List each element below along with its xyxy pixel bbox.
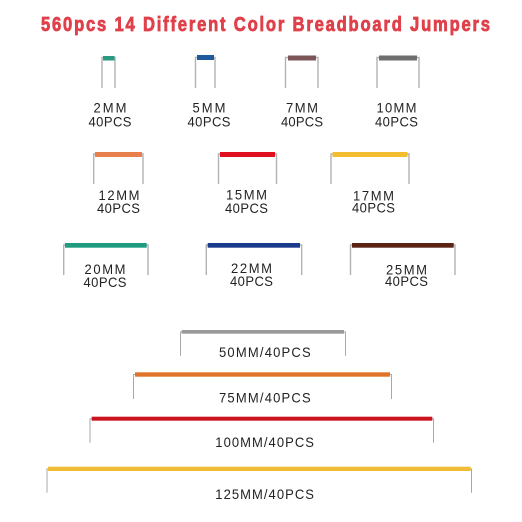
jumper: 75MM orange: 75MM/40PCS	[219, 390, 311, 406]
jumper: 100MM red	[90, 417, 434, 450]
jumper: 50MM gray: 50MM/40PCS	[219, 345, 311, 360]
jumper: 100MM red: 100MM/40PCS	[215, 435, 314, 450]
jumper: 7MM brown	[281, 56, 323, 130]
jumper: 20MM teal: 20MM	[84, 262, 126, 277]
jumper: 10MM gray: 10MM	[376, 100, 416, 116]
jumper: 22MM navy	[206, 243, 302, 289]
jumper: 15MM red: 40PCS	[225, 201, 268, 216]
jumper: 15MM red	[218, 152, 276, 216]
jumper: 10MM gray	[375, 56, 419, 130]
jumper: 125MM yellow	[47, 467, 472, 502]
jumper: 20MM teal	[64, 243, 148, 290]
jumper: 5MM blue: 40PCS	[188, 114, 230, 130]
jumper: 5MM blue	[188, 55, 230, 130]
jumper: 125MM yellow: 125MM/40PCS	[215, 487, 314, 502]
title: 560pcs 14 Different Color Breadboard Jumpers	[41, 13, 490, 35]
jumper: 25MM dark brown	[350, 243, 455, 289]
jumper: 20MM teal: 40PCS	[84, 275, 126, 290]
jumper: 7MM brown: 40PCS	[281, 114, 323, 130]
jumper: 12MM orange: 12MM	[98, 188, 140, 203]
jumper: 22MM navy: 22MM	[231, 261, 272, 276]
jumper: 17MM yellow	[331, 152, 409, 216]
jumper: 10MM gray: 40PCS	[375, 114, 418, 130]
jumper: 2MM teal	[88, 56, 131, 130]
jumper: 25MM dark brown: 25MM	[386, 262, 427, 278]
jumper: 12MM orange	[94, 152, 143, 216]
jumper: 5MM blue: 5MM	[192, 100, 226, 116]
jumper: 7MM brown: 7MM	[286, 100, 318, 116]
jumper: 17MM yellow: 17MM	[353, 188, 394, 204]
jumper: 2MM teal: 2MM	[94, 100, 127, 116]
jumper: 22MM navy: 40PCS	[230, 274, 273, 289]
jumper: 15MM red: 15MM	[226, 187, 267, 203]
jumper: 17MM yellow: 40PCS	[352, 200, 395, 216]
jumper: 2MM teal: 40PCS	[88, 114, 131, 130]
jumper: 25MM dark brown: 40PCS	[385, 274, 428, 289]
jumper: 75MM orange	[134, 372, 392, 406]
jumper: 50MM gray	[180, 330, 346, 360]
jumper: 12MM orange: 40PCS	[97, 201, 140, 216]
